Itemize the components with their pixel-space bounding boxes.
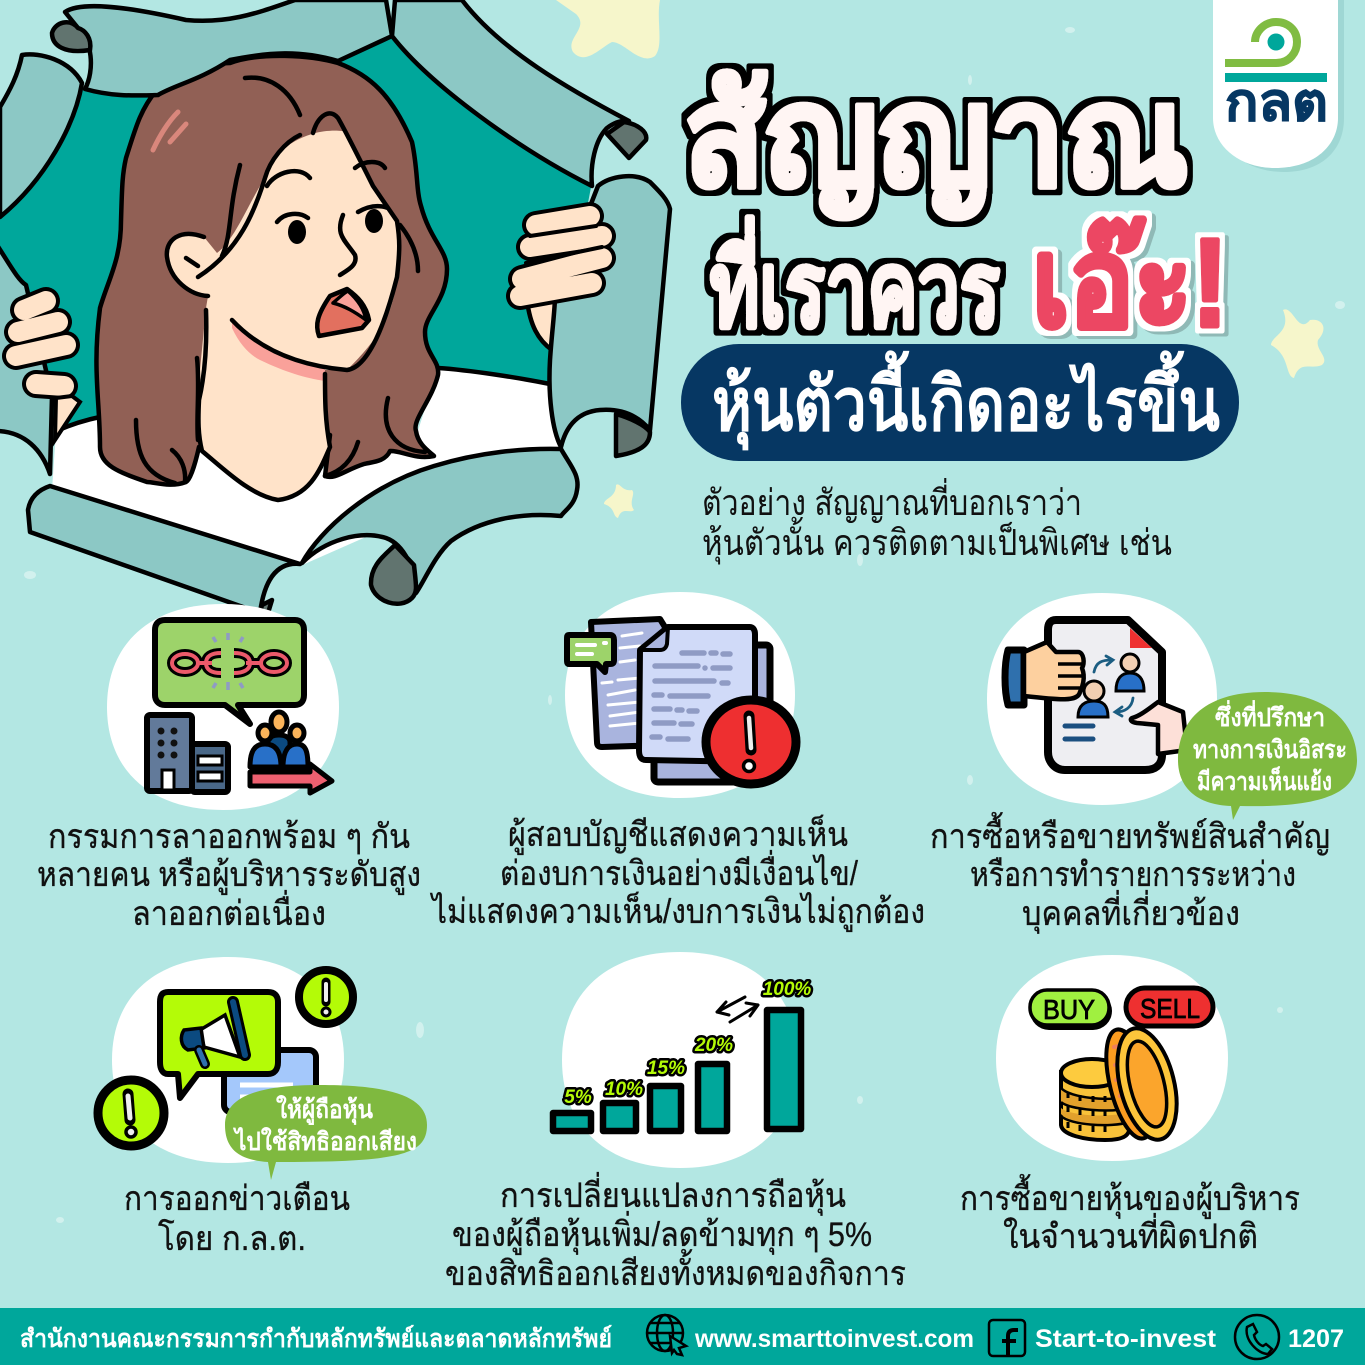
logo bar xyxy=(1225,73,1327,82)
caption 2: ต่องบการเงินอย่างมีเงื่อนไข/ xyxy=(500,850,858,893)
red corner xyxy=(1130,628,1152,648)
decorative star top xyxy=(556,0,660,58)
shirt collar lines xyxy=(56,368,550,431)
chain xyxy=(172,633,287,690)
paper flap right-top xyxy=(392,0,646,186)
footer organisation: สำนักงานคณะกรรมการกำกับหลักทรัพย์และตลาดหลักทรัพย์ xyxy=(20,1324,612,1353)
title line 2: ที่เราควร xyxy=(710,216,1000,349)
paper flap top xyxy=(52,0,392,95)
paper flap left-top xyxy=(0,54,82,217)
bar chart: shareholding steps xyxy=(553,979,811,1131)
subtitle pill xyxy=(681,344,1239,461)
document xyxy=(1048,620,1162,770)
mouth xyxy=(317,289,369,336)
illustration: woman peeking through torn paper xyxy=(0,0,670,613)
caption 3: บุคคลที่เกี่ยวข้อง xyxy=(1022,890,1240,934)
people xyxy=(250,712,308,768)
exclamation top xyxy=(299,970,353,1024)
coin stack xyxy=(1061,1059,1130,1140)
paper flap bottom-left xyxy=(28,486,300,613)
main document xyxy=(639,627,755,762)
caption 1 xyxy=(37,818,421,933)
callout: independent financial adviser: มีความเห็นแย้ง xyxy=(1197,766,1332,796)
callout: shareholders use voting rights xyxy=(225,1085,427,1180)
face and neck xyxy=(167,131,399,500)
blob 4 xyxy=(112,957,344,1163)
caption 5: การเปลี่ยนแปลงการถือหุ้น xyxy=(500,1172,846,1216)
lime bubble xyxy=(160,992,278,1098)
caption 2: ผู้สอบบัญชีแสดงความเห็น xyxy=(508,814,848,855)
percentage labels: 5% xyxy=(564,1087,592,1108)
buy button xyxy=(1030,990,1112,1030)
right back document xyxy=(654,645,770,782)
paper flap bottom-right xyxy=(302,449,578,604)
caption 3: การซื้อหรือขายทรัพย์สินสำคัญ xyxy=(930,812,1330,856)
logo dot xyxy=(1268,34,1284,50)
sell button: SELL xyxy=(1140,993,1200,1024)
big coin xyxy=(1097,1022,1187,1146)
footer website: www.smarttoinvest.com xyxy=(694,1325,974,1353)
eyes xyxy=(288,209,383,244)
subtitle text: หุ้นตัวนี้เกิดอะไรขึ้น xyxy=(712,350,1220,451)
intro text xyxy=(702,478,1172,565)
caption 5: ของสิทธิออกเสียงทั้งหมดของกิจการ xyxy=(445,1249,906,1293)
building xyxy=(147,715,228,792)
caption 4 xyxy=(124,1180,350,1258)
transfer arrows xyxy=(1094,656,1133,716)
blue card xyxy=(224,1050,316,1112)
exit arrow xyxy=(250,764,332,793)
logo mark xyxy=(1225,22,1297,63)
callout: independent financial adviser xyxy=(1178,692,1357,820)
folded corner xyxy=(640,627,668,650)
caption 1: ลาออกต่อเนื่อง xyxy=(132,890,326,933)
caption 5: ของผู้ถือหุ้นเพิ่ม/ลดข้ามทุก ๆ 5% xyxy=(452,1211,872,1255)
caption 3: หรือการทำรายการระหว่าง xyxy=(970,856,1296,894)
icon: warning news xyxy=(98,970,353,1146)
footer hotline: 1207 xyxy=(1288,1325,1344,1353)
chat bubble xyxy=(155,620,304,724)
intro text: หุ้นตัวนั้น ควรติดตามเป็นพิเศษ เช่น xyxy=(702,516,1172,565)
caption 2: ไม่แสดงความเห็น/งบการเงินไม่ถูกต้อง xyxy=(429,891,925,932)
face lines xyxy=(167,113,399,500)
bars xyxy=(553,1010,801,1131)
bar chart: shareholding steps: 15% xyxy=(647,1058,685,1079)
blob 5 xyxy=(562,952,798,1168)
white shirt xyxy=(52,368,563,566)
exclamation left xyxy=(98,1080,164,1146)
caption 4: โดย ก.ล.ต. xyxy=(158,1219,306,1258)
teal hole xyxy=(0,36,592,440)
caption 6: การซื้อขายหุ้นของผู้บริหาร xyxy=(960,1174,1300,1219)
right hand fingers xyxy=(520,216,602,296)
hair strand lines xyxy=(136,78,425,483)
icon: globe xyxy=(647,1315,686,1355)
person 2 xyxy=(1078,681,1108,717)
caption 6: ในจำนวนที่ผิดปกติ xyxy=(1003,1213,1258,1256)
person 1 xyxy=(1116,654,1144,691)
icon: phone xyxy=(1235,1315,1279,1359)
blob 6 xyxy=(996,955,1228,1161)
intro text: ตัวอย่าง สัญญาณที่บอกเราว่า xyxy=(702,478,1082,523)
left hand fingers xyxy=(16,301,80,440)
callout: shareholders use voting rights: ให้ผู้ถือหุ้น xyxy=(276,1094,373,1126)
hair highlight xyxy=(153,112,186,150)
caption 4: การออกข่าวเตือน xyxy=(124,1180,350,1218)
caption 2 xyxy=(429,814,925,932)
red alert xyxy=(706,700,796,784)
doc lines xyxy=(1065,726,1093,739)
back document xyxy=(591,619,668,747)
footer bar xyxy=(0,1308,1365,1365)
paper flap right xyxy=(549,176,670,456)
green comment xyxy=(567,635,614,672)
caption 5 xyxy=(445,1172,906,1293)
hair xyxy=(96,56,447,485)
bar chart: shareholding steps: 10% xyxy=(605,1079,643,1100)
double arrow xyxy=(717,997,758,1022)
logo tab xyxy=(1213,0,1344,172)
logo text: กลต xyxy=(1225,74,1328,132)
caption 6 xyxy=(960,1174,1300,1256)
sell button xyxy=(1126,988,1213,1026)
bar chart: shareholding steps: 100% xyxy=(763,979,811,1000)
caption 3 xyxy=(930,812,1330,934)
icon: documents with alert xyxy=(567,619,796,784)
icon: facebook xyxy=(989,1320,1025,1356)
decorative star small xyxy=(604,484,634,518)
blob 3 xyxy=(987,593,1217,805)
footer facebook name: Start-to-invest xyxy=(1035,1325,1217,1353)
title line 1: สัญญาณ xyxy=(684,58,1188,220)
neck shadow xyxy=(232,320,325,381)
document text lines xyxy=(652,653,730,739)
icon: broken chain, building, leaving people xyxy=(147,620,332,793)
decorative star right xyxy=(1271,309,1324,378)
left hand and sleeve xyxy=(1005,642,1084,705)
bar chart: shareholding steps: 20% xyxy=(694,1035,733,1056)
right hand palm xyxy=(527,300,560,350)
icon: buy sell coins xyxy=(1030,988,1213,1146)
blob 2 xyxy=(565,592,795,798)
right hand xyxy=(1131,702,1187,754)
caption 1: กรรมการลาออกพร้อม ๆ กัน xyxy=(48,818,410,856)
callout: independent financial adviser: ซึ่งที่ปรึกษา xyxy=(1215,700,1325,732)
caption 1: หลายคน หรือผู้บริหารระดับสูง xyxy=(37,856,421,895)
buy button: BUY xyxy=(1043,994,1095,1025)
title accent: เอ๊ะ! xyxy=(1032,214,1228,353)
megaphone xyxy=(181,1002,245,1064)
paper flap left-lower xyxy=(0,245,52,474)
blob 1 xyxy=(107,604,339,810)
callout: shareholders use voting rights: ไปใช้สิทธิออกเสียง xyxy=(232,1126,417,1156)
icon: asset transfer document xyxy=(1005,620,1187,770)
